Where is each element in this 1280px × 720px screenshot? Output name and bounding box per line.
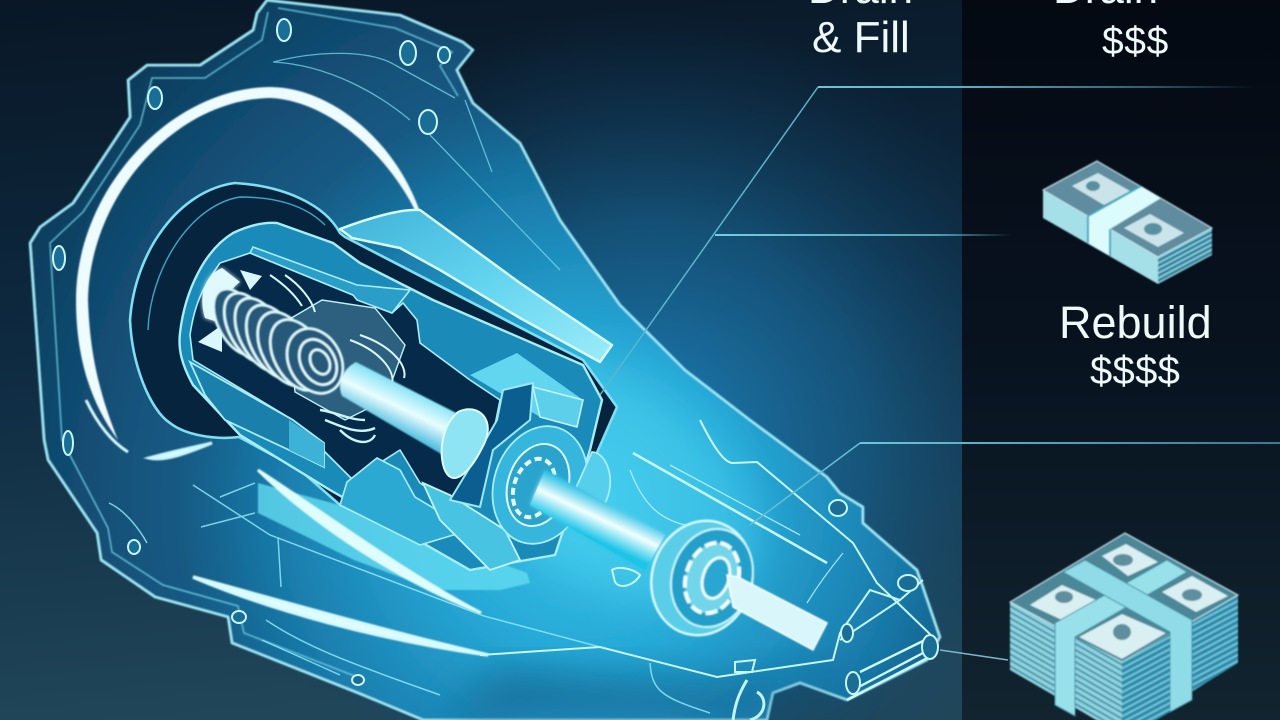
lower shell glow patch: [258, 483, 530, 590]
heading: drain and fill: [808, 0, 913, 62]
bill seals: [1055, 554, 1202, 603]
leader: upper tail diagonal: [750, 443, 860, 525]
centre bearing: [478, 414, 602, 556]
clutch coil stack: [203, 281, 354, 403]
right bearing block: [533, 387, 583, 427]
bill top left: [1030, 585, 1096, 620]
bill top back: [1102, 544, 1158, 576]
panel: cost column: [962, 0, 1280, 720]
housing body: [30, 0, 940, 720]
clutch bright glints: [198, 270, 262, 352]
cost: four dollars: $$$$: [1090, 349, 1180, 393]
label: and fill: & Fill: [812, 13, 910, 62]
bill seal back: [1086, 181, 1100, 191]
tail secondary lines: [630, 465, 843, 603]
front stack left: [1077, 637, 1122, 720]
leader: replacement: [940, 650, 1008, 660]
heading: drain cost: [1053, 0, 1169, 63]
bill note: back: [1072, 173, 1130, 205]
upper rail wedge: [250, 247, 410, 313]
bill top right: [1162, 576, 1228, 612]
leader: lower rule: [860, 442, 1280, 444]
lower coil glints: [320, 410, 375, 442]
tail small loops: [612, 568, 755, 672]
transmission cutaway illustration: [30, 0, 940, 720]
tail inner contour: [700, 420, 933, 637]
leader: rebuild: [715, 234, 1012, 236]
end lug bars: [847, 640, 937, 700]
second coil arcs: [270, 275, 405, 385]
label: rebuild: Rebuild: [1059, 297, 1212, 348]
tail shell right part: [575, 452, 610, 505]
dark crescent ring: [450, 383, 533, 507]
bright upper cover: [340, 210, 612, 362]
cross strap long: [1063, 560, 1192, 712]
inner capsule floor: [180, 223, 602, 570]
front bill: [1077, 613, 1168, 660]
shaft flange: [442, 409, 488, 478]
hex clutch block: [288, 300, 405, 420]
icon: money bundle: [1043, 161, 1212, 284]
leader: diagonal to drain and fill: [600, 87, 818, 395]
bell inner ring line: [148, 197, 325, 330]
cost: three dollars: $$$: [1102, 20, 1169, 63]
dark cavity: [190, 253, 500, 503]
bundle right face: [1158, 228, 1212, 284]
lower right blocks: [423, 483, 520, 570]
pilot bearing ring: [202, 268, 240, 325]
stack left face: [1010, 602, 1122, 720]
tail shaft: [530, 470, 665, 570]
bill note: front: [1124, 214, 1184, 247]
lower cavity block: [340, 458, 470, 545]
flange stiffening lines: [273, 53, 560, 270]
front bill seal: [1113, 624, 1131, 640]
lit floor patch: [470, 353, 583, 427]
lower left wall: [190, 362, 324, 467]
tail lines: [480, 420, 933, 677]
bill seal front: [1144, 223, 1162, 235]
bundle left face: [1043, 190, 1158, 284]
icon: large money stack: [1010, 533, 1238, 720]
lower wall block: [289, 420, 324, 467]
pan outline lines: [109, 483, 710, 713]
bottom contour: [480, 580, 923, 677]
lower pan shade: [440, 668, 847, 720]
dark bell recess: [130, 183, 617, 565]
front stack right: [1122, 634, 1170, 720]
paper strap: [1088, 186, 1161, 256]
bell housing disc rim: [76, 87, 420, 440]
housing double contour: [50, 8, 458, 680]
output spline: [727, 575, 827, 650]
cross strap short: [1055, 560, 1187, 716]
tail long highlight: [633, 453, 827, 563]
leader lines: [600, 86, 1280, 660]
central glow: [414, 299, 806, 661]
tail cap flange: [637, 507, 767, 649]
flange bolts: [53, 19, 938, 694]
bundle top face: [1043, 161, 1212, 257]
lower bright streaks: [86, 400, 488, 655]
stack right face: [1122, 595, 1238, 720]
main shaft: [340, 362, 470, 458]
strap edge: [1088, 186, 1141, 256]
leader: top rule: [818, 86, 1255, 88]
bottom scroll detail: [733, 680, 764, 720]
stack top: [1010, 533, 1238, 662]
